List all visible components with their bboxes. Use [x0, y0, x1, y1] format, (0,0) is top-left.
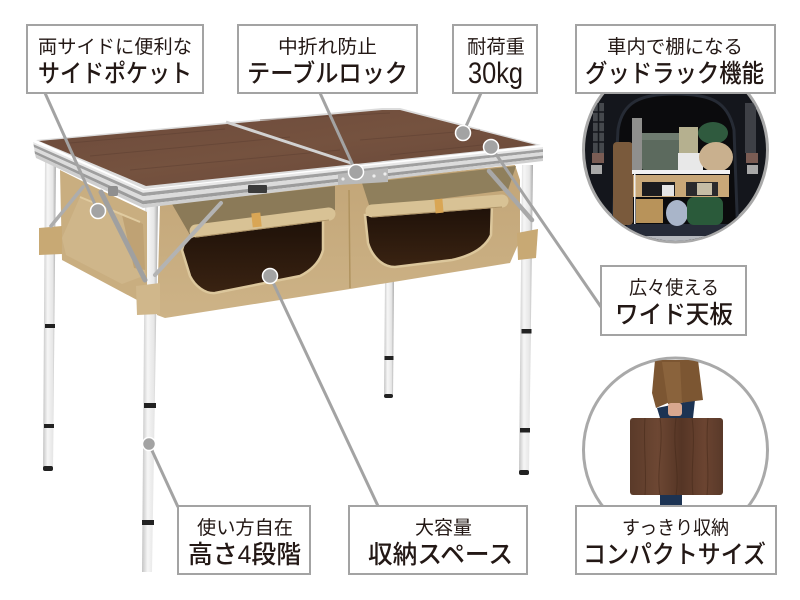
callout: wide top — [601, 266, 746, 335]
storage window left — [182, 217, 323, 293]
callout: good rack — [576, 25, 775, 93]
hinge plate — [338, 168, 388, 185]
callout: storage — [349, 506, 527, 574]
callout: height: 使い方自在 — [197, 517, 293, 539]
callout: side pocket — [27, 25, 203, 93]
photo circle: car interior — [582, 94, 769, 244]
leader line: wide top — [484, 140, 601, 307]
table illustration — [33, 108, 543, 572]
callout: height: 高さ4段階 — [188, 541, 301, 569]
callout: compact — [576, 506, 776, 574]
callout: compact: コンパクトサイズ — [583, 541, 766, 569]
photo circle: carried folded table — [582, 356, 769, 505]
leader line: side pocket — [45, 93, 106, 218]
storage window right — [365, 203, 492, 267]
table frame front — [143, 147, 543, 208]
callout: storage: 収納スペース — [368, 541, 513, 569]
brand label — [248, 185, 267, 193]
callout: load capacity: 30kg — [468, 57, 523, 90]
callout: table lock — [238, 25, 417, 93]
shelf table in car — [632, 170, 730, 224]
support arms — [51, 171, 532, 280]
table top — [36, 108, 541, 189]
callout: wide top: ワイド天板 — [615, 301, 733, 329]
callout: wide top: 広々使える — [629, 277, 719, 299]
fabric storage body — [157, 165, 520, 318]
cargo floor — [626, 224, 728, 236]
callout: load capacity — [453, 25, 537, 93]
taillights — [591, 103, 758, 174]
fabric side pocket — [60, 170, 147, 306]
cargo lower — [636, 197, 723, 226]
leader line: table lock — [320, 93, 364, 180]
leader line: storage — [262, 268, 378, 506]
callout: storage: 大容量 — [415, 517, 472, 539]
callout: good rack: 車内で棚になる — [607, 36, 743, 58]
callout: good rack: グッドラック機能 — [585, 60, 764, 88]
cargo upper — [613, 118, 733, 225]
callout: table lock: 中折れ防止 — [278, 36, 377, 58]
callout: height — [178, 506, 310, 574]
leader line: height — [142, 438, 178, 507]
frame bracket — [108, 186, 118, 196]
person — [652, 360, 703, 506]
callout: side pocket: サイドポケット — [38, 60, 192, 88]
table legs — [43, 160, 533, 572]
callout: load capacity: 耐荷重 — [467, 36, 525, 58]
callout: compact: すっきり収納 — [622, 517, 729, 539]
folded table board — [630, 418, 723, 495]
rolled flaps — [196, 199, 502, 237]
callout: table lock: テーブルロック — [247, 60, 408, 88]
table frame left — [33, 142, 143, 208]
callout: side pocket: 両サイドに便利な — [38, 36, 192, 58]
leg sleeves — [39, 226, 538, 315]
leader line: load capacity — [456, 93, 481, 140]
